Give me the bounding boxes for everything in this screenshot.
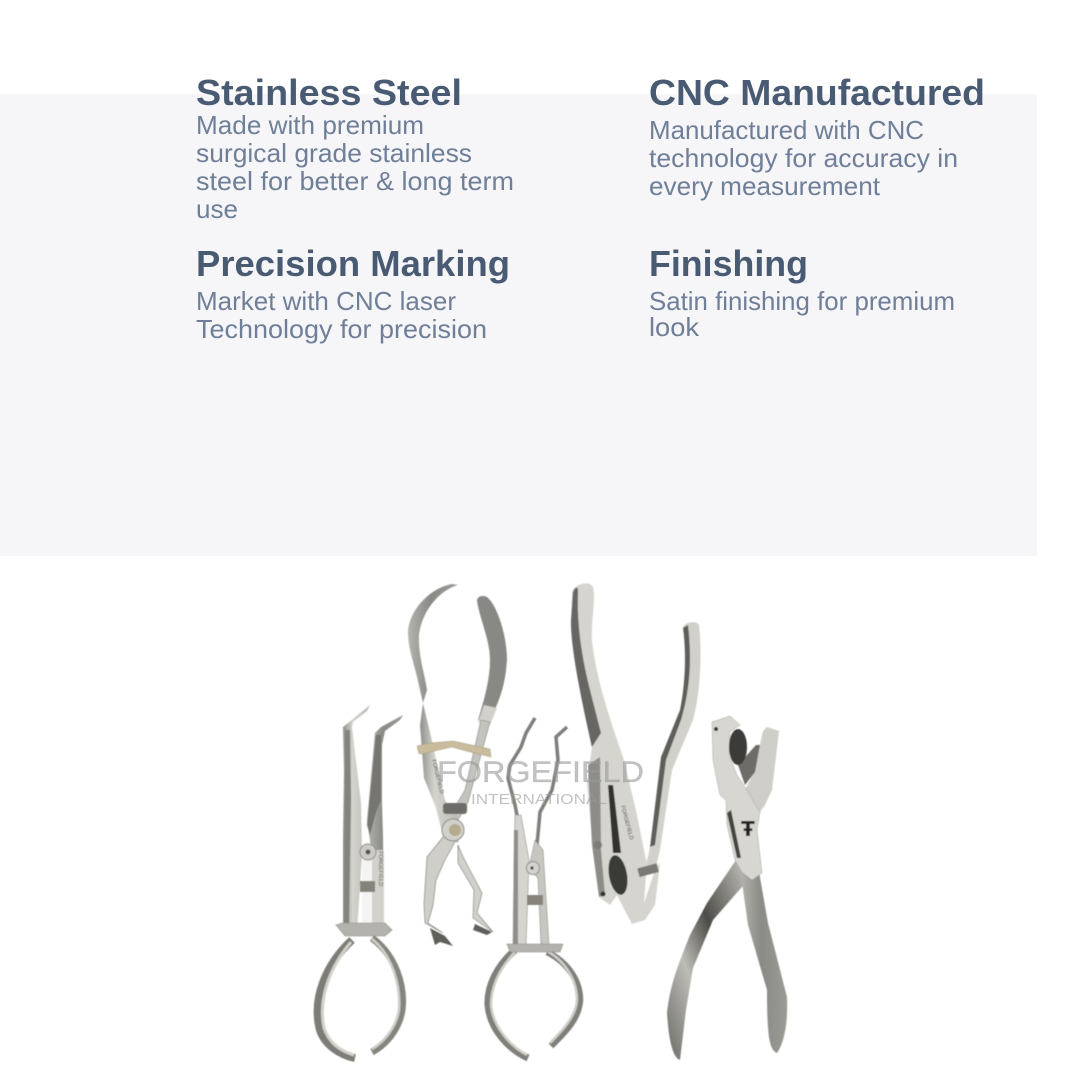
instrument: wire-tip retractor forceps — [488, 718, 580, 1058]
engraving: brand mark: FORGEFIELD — [430, 759, 444, 795]
text: stainless steel description: steel for better & long term — [196, 166, 514, 196]
logo: forgefield mark: Ŧ — [741, 817, 755, 841]
text: stainless steel description — [196, 110, 514, 224]
panel: background — [0, 94, 1037, 556]
instrument: large clamp forceps — [571, 583, 701, 924]
text: CNC manufactured description: technology for accuracy in — [649, 143, 958, 173]
text: precision marking description: Technology for precision — [196, 314, 487, 344]
text: stainless steel description: use — [196, 194, 238, 224]
feature: finishing — [649, 243, 955, 342]
text: CNC manufactured description: every measurement — [649, 171, 881, 201]
text: precision marking description: Market with CNC laser — [196, 286, 456, 316]
text: precision marking description — [196, 286, 487, 344]
instrument: rotary rubber dam punch — [667, 716, 787, 1060]
text: finishing description: Satin finishing for premium — [649, 286, 955, 316]
engraving: brand mark: FORGEFIELD — [619, 805, 634, 840]
band: brass retaining band — [417, 741, 491, 757]
feature: CNC manufactured — [649, 72, 985, 201]
heading: stainless steel: Stainless Steel — [196, 72, 462, 113]
text: stainless steel description: surgical grade stainless — [196, 138, 472, 168]
watermark: forgefield international — [437, 756, 644, 808]
text: CNC manufactured description: Manufactured with CNC — [649, 115, 924, 145]
heading: finishing: Finishing — [649, 243, 808, 284]
heading: precision marking: Precision Marking — [196, 243, 510, 284]
text: finishing description — [649, 286, 955, 342]
instrument: left angled retractor forceps — [318, 705, 403, 1058]
feature: stainless steel — [196, 72, 514, 224]
engraving: brand mark: FORGEFIELD — [377, 851, 383, 886]
watermark: forgefield international: FORGEFIELD — [437, 756, 644, 789]
text: stainless steel description: Made with premium — [196, 110, 424, 140]
instrument: central retractor forceps with curved wings — [408, 584, 507, 946]
heading: CNC manufactured: CNC Manufactured — [649, 72, 985, 113]
feature: precision marking — [196, 243, 510, 344]
text: CNC manufactured description — [649, 115, 958, 201]
watermark: forgefield international: INTERNATIONAL — [471, 791, 607, 808]
text: finishing description: look — [649, 312, 700, 342]
